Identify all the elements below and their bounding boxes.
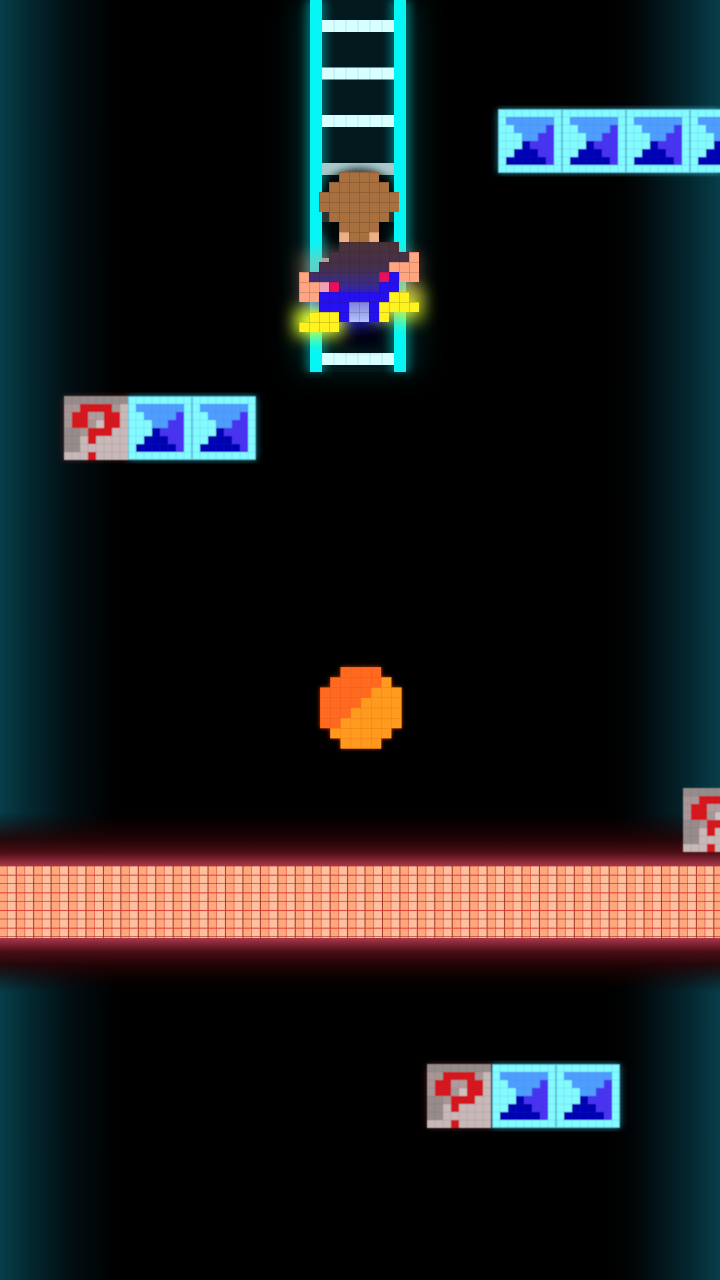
player glow — [295, 168, 423, 348]
overalls — [319, 272, 399, 322]
lava upper glow — [0, 812, 720, 866]
block row: middle left — [64, 396, 256, 460]
block row: upper right — [498, 109, 720, 173]
ball glow — [320, 667, 402, 749]
left edge glow — [0, 0, 115, 1280]
ball body — [320, 667, 402, 749]
player pixel grid — [299, 172, 419, 332]
ball pixel grid — [320, 667, 402, 749]
player character — [295, 168, 423, 348]
block row: bottom — [427, 1064, 620, 1128]
right edge glow — [605, 0, 720, 1280]
shirt — [309, 242, 409, 292]
light box — [349, 302, 369, 322]
hands and arms — [299, 252, 419, 302]
buttons — [329, 272, 389, 292]
orange ball — [320, 667, 402, 749]
block: right edge question — [683, 788, 720, 852]
neck skin — [339, 232, 379, 242]
ladder — [296, 0, 420, 372]
hair — [319, 172, 399, 242]
ball highlight — [330, 677, 402, 749]
lava lower glow — [0, 938, 720, 992]
boots — [299, 292, 419, 332]
lava floor — [0, 866, 720, 938]
